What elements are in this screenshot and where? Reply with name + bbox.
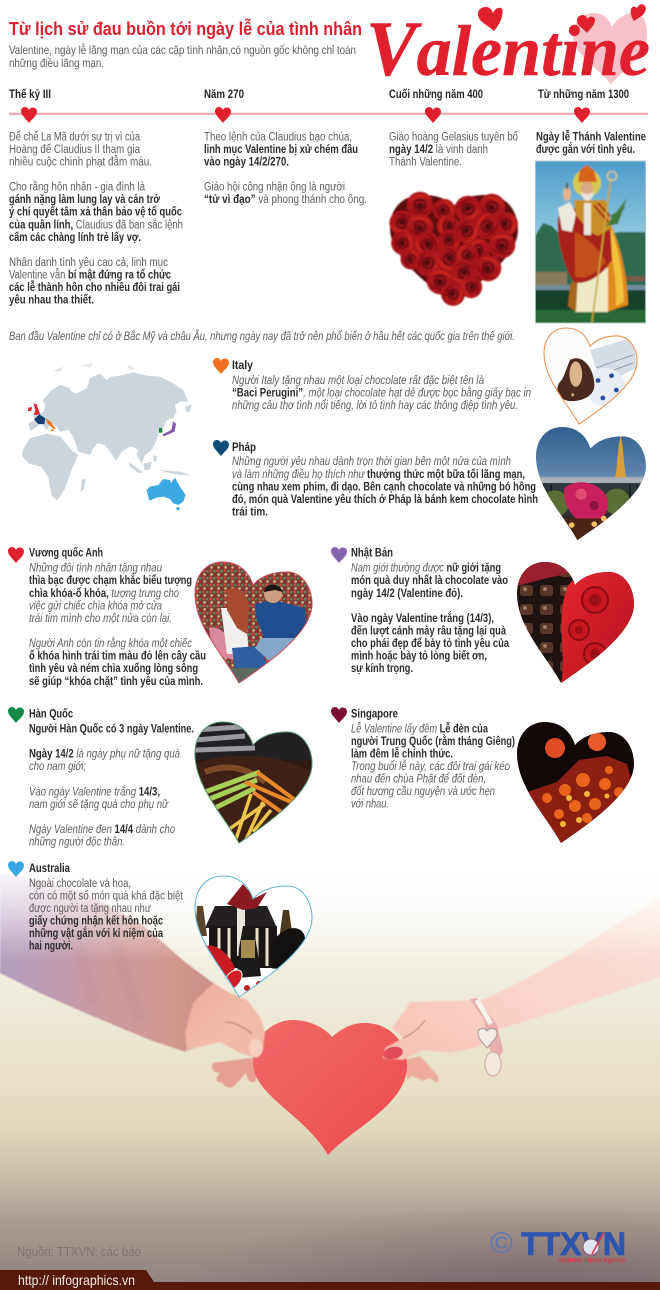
image: rose heart	[386, 189, 520, 310]
body: và làm những điều họ thích như thưởng thức một bữa tối lãng mạn,	[232, 469, 525, 481]
body: sự kính trọng.	[351, 663, 413, 675]
body: giấy chứng nhận kết hôn hoặc	[29, 916, 163, 928]
Italy	[46, 418, 56, 431]
title: Từ lịch sử đau buồn tới ngày lễ của tình nhân	[9, 18, 362, 39]
body: chìa khóa-ổ khóa, tượng trưng cho	[29, 588, 179, 600]
timeline heart 4	[574, 107, 590, 123]
section: Italy	[213, 358, 531, 412]
column: Thế kỷ III text: Cho rằng hôn nhân - gia đình là	[9, 180, 146, 194]
column: Thế kỷ III text: Nhân danh tình yêu cao cả, linh mục	[9, 257, 168, 269]
body: trái tim.	[232, 506, 268, 518]
image frame	[536, 161, 646, 323]
column: Từ những năm 1300 text	[536, 130, 646, 156]
body	[29, 562, 206, 688]
word Valentine: Valentine	[366, 5, 650, 92]
body: Người Hàn Quốc có 3 ngày Valentine.	[29, 724, 194, 736]
column: Năm 270 text	[204, 132, 367, 206]
body: Vào ngày Valentine trắng 14/3,	[29, 786, 160, 798]
wordmark: TTXVN	[521, 1226, 626, 1262]
column: Cuối những năm 400 text: Thánh Valentine.	[389, 156, 462, 168]
column: Thế kỷ III text: gánh nặng làm lung lay và cản trở	[9, 194, 161, 206]
body: Lễ Valentine lấy đêm Lễ đèn của	[351, 722, 488, 736]
column: Thế kỷ III text: cấm các chàng lính trẻ lấy vợ.	[9, 232, 141, 244]
footer url: http:// infographics.vn	[18, 1272, 135, 1288]
body: Trong buổi lễ này, các đôi trai gái kéo	[351, 760, 511, 773]
world map	[22, 363, 192, 510]
body: Người Italy tặng nhau một loại chocolate rất đặc biệt tên là	[232, 375, 484, 387]
column: Năm 270 text: “tử vì đạo” và phong thánh cho ông.	[204, 194, 367, 206]
photo: right arm with hand and bracelet	[382, 897, 660, 1076]
body: còn có một số món quà khá đặc biệt	[29, 890, 184, 902]
fade of photo top into white	[0, 860, 660, 960]
section: Nhật Bản	[331, 547, 509, 675]
image: Paris dinner heart	[536, 427, 646, 541]
South Korea	[159, 428, 162, 433]
body: tình yêu và ném chìa xuống lòng sông	[29, 663, 198, 675]
column: Thế kỷ III text: Valentine vẫn bí mật đứng ra tổ chức	[9, 268, 171, 282]
column: Thế kỷ III text: nhiều cuộc chinh phạt đẫm máu.	[9, 156, 152, 168]
icon: blue heart	[8, 861, 24, 877]
body: hai người.	[29, 940, 73, 952]
globe on V	[583, 1232, 604, 1255]
body: những câu thơ tình nổi tiếng, lời tỏ tình hay các thông điệp tình yêu.	[232, 400, 518, 412]
timeline headings	[9, 89, 629, 101]
body: cho phái đẹp để bày tỏ tình yêu của	[351, 638, 509, 650]
intro text: Valentine, ngày lễ lãng mạn của các cặp tình nhân,có nguồn gốc không chỉ toàn	[9, 42, 356, 57]
section: Singapore	[331, 707, 515, 810]
nail	[382, 1045, 404, 1061]
timeline headings: Từ những năm 1300	[538, 89, 629, 101]
column: Năm 270 text: Theo lệnh của Claudius bạo chúa,	[204, 132, 352, 144]
heading: Nhật Bản	[351, 548, 393, 560]
heart accent 1	[478, 7, 503, 31]
column: Cuối những năm 400 text	[389, 132, 519, 168]
body: làm đêm lễ chính thức.	[351, 748, 453, 760]
icon: maroon heart	[331, 707, 347, 723]
body: món quà duy nhất là chocolate vào	[351, 575, 508, 587]
icon: orange heart	[213, 358, 229, 374]
column: Thế kỷ III text: yêu nhau tha thiết.	[9, 294, 94, 306]
body	[351, 722, 515, 810]
body: “Baci Perugini”, một loại chocolate hạt dẻ được bọc bằng giấy bạc in	[232, 386, 531, 400]
body	[232, 375, 531, 412]
body: Nam giới thường được nữ giới tặng	[351, 562, 501, 574]
Japan	[163, 421, 176, 436]
timeline heart 3	[425, 107, 441, 123]
body	[232, 456, 538, 518]
timeline heart 2	[215, 107, 231, 123]
section: Vương quốc Anh	[8, 547, 206, 688]
body: Những đôi tình nhân tặng nhau	[29, 562, 162, 574]
timeline headings: Năm 270	[204, 89, 244, 101]
copyright mark: ©	[490, 1227, 513, 1260]
bracelet	[470, 998, 503, 1062]
body: được người ta tặng nhau như	[29, 903, 151, 915]
photo: red paper heart	[253, 1020, 407, 1155]
body: người Trung Quốc (rằm tháng Giêng)	[351, 735, 515, 748]
heading: Vương quốc Anh	[29, 548, 103, 560]
big title word with hearts	[366, 4, 650, 92]
column: Thế kỷ III text: Hoàng đế Claudius II tham gia	[9, 144, 141, 156]
body: đến lượt cánh mày râu tặng lại quà	[351, 626, 506, 638]
sleeve	[0, 872, 213, 1052]
logo: TTXVN	[490, 1226, 627, 1264]
icon: navy heart	[213, 440, 229, 456]
body: sẽ giúp “khóa chặt” tình yêu của mình.	[29, 676, 203, 688]
intro text: những điều lãng mạn.	[9, 56, 104, 70]
heading: Australia	[29, 863, 70, 875]
column: Năm 270 text: linh mục Valentine bị xử chém đầu	[204, 144, 358, 156]
body: Ngày Valentine đen 14/4 dành cho	[29, 824, 176, 836]
image: love locks couple heart	[195, 562, 312, 684]
footer bar	[0, 1270, 660, 1290]
column: Năm 270 text: vào ngày 14/2/270.	[204, 156, 289, 168]
body	[29, 878, 184, 952]
body: Những người yêu nhau dành trọn thời gian bên một nửa của mình	[232, 456, 511, 468]
column: Năm 270 text: Giáo hội công nhận ông là người	[204, 182, 345, 194]
land masses	[22, 363, 192, 500]
image: gift box heart	[195, 876, 312, 997]
body: với nhau.	[351, 798, 389, 810]
heading: Italy	[232, 360, 254, 372]
icon: green heart	[8, 707, 24, 723]
body: ổ khóa hình trái tim màu đỏ lên cây cầu	[29, 650, 206, 662]
image: Italy chocolate heart	[544, 328, 637, 424]
halo	[573, 169, 601, 197]
image: chocolate box heart	[517, 562, 634, 684]
column: Thế kỷ III text: của quân lính, Claudius đã ban sắc lệnh	[9, 218, 183, 232]
section: Australia	[8, 861, 184, 952]
note line: Ban đầu Valentine chỉ có ở Bắc Mỹ và châu Âu, nhưng ngày nay đã trở nên phổ biến ở hầu hết các quốc gia trên thế giới.	[9, 330, 515, 343]
heart accent 2	[577, 15, 595, 33]
photo: fingers behind paper heart	[212, 1056, 438, 1088]
body: đốt hương cầu nguyện và ước hẹn	[351, 786, 495, 798]
body: trái tim mình cho một nửa còn lại.	[29, 613, 172, 625]
column: Thế kỷ III text: Để chế La Mã dưới sự trị vì của	[9, 132, 140, 144]
image: Saint Valentine portrait	[535, 161, 646, 323]
column: Cuối những năm 400 text: Giáo hoàng Gelasius tuyên bố	[389, 132, 519, 144]
photo: left arm with sleeve and hand	[0, 872, 265, 1058]
body: những người độc thân.	[29, 836, 125, 848]
column: Thế kỷ III text	[9, 132, 183, 306]
timeline	[9, 107, 648, 123]
timeline headings: Cuối những năm 400	[389, 89, 483, 101]
timeline heart 1	[21, 107, 37, 123]
body: Người Anh còn tin rằng khóa một chiếc	[29, 637, 192, 650]
United Kingdom	[28, 403, 40, 415]
agency line: Vietnam News Agency	[558, 1258, 627, 1264]
pale heart behind word	[573, 13, 647, 84]
body: việc gửi chiếc chìa khóa mở cửa	[29, 600, 162, 612]
body: Ngoài chocolate và hoa,	[29, 878, 131, 890]
charm drop	[485, 1052, 501, 1076]
heading: Pháp	[232, 442, 256, 454]
timeline headings: Thế kỷ III	[9, 89, 51, 101]
source note: Nguồn: TTXVN; các báo	[17, 1244, 141, 1259]
body: nhau đến chùa Phật để đốt đèn,	[351, 774, 486, 786]
section: Hàn Quốc	[8, 707, 194, 848]
body: thìa bạc được chạm khắc biểu tượng	[29, 574, 192, 587]
body: đỏ, món quà Valentine yêu thích ở Pháp là bánh kem chocolate hình	[232, 494, 538, 506]
body: cùng nhau xem phim, đi dạo. Bên cạnh chocolate và những bó hồng	[232, 482, 536, 494]
France	[34, 414, 45, 424]
body	[29, 724, 194, 848]
image: Korean noodles heart	[195, 722, 312, 843]
body: nam giới sẽ tặng quà cho phụ nữ	[29, 799, 169, 811]
icon: purple heart	[331, 547, 347, 563]
column: Từ những năm 1300 text: được gắn với tình yêu.	[536, 143, 635, 156]
body: cho nam giới;	[29, 761, 86, 773]
image: lantern festival heart	[517, 722, 634, 844]
heart accent 3	[631, 4, 646, 21]
column: Thế kỷ III text: các lễ thành hôn cho nhiều đôi trai gái	[9, 281, 180, 294]
body: Ngày 14/2 là ngày phụ nữ tặng quà	[29, 748, 181, 760]
heading: Hàn Quốc	[29, 708, 73, 720]
body: ngày 14/2 (Valentine đỏ).	[351, 588, 463, 600]
column: Cuối những năm 400 text: ngày 14/2 là vinh danh	[389, 144, 488, 156]
body	[351, 562, 509, 675]
section: Pháp	[213, 440, 538, 518]
Australia	[147, 478, 186, 505]
body: những vật gắn với kỉ niệm của	[29, 927, 163, 940]
hand	[185, 983, 265, 1058]
body: Vào ngày Valentine trắng (14/3),	[351, 612, 494, 625]
charm heart	[478, 1029, 497, 1048]
intro text	[9, 42, 356, 70]
column: Thế kỷ III text: ý chí quyết tâm xả thân bảo vệ tổ quốc	[9, 206, 182, 218]
heading: Singapore	[351, 708, 398, 720]
body: mình hoặc bày tỏ lòng biết ơn,	[351, 650, 487, 662]
icon: red heart	[8, 547, 24, 563]
